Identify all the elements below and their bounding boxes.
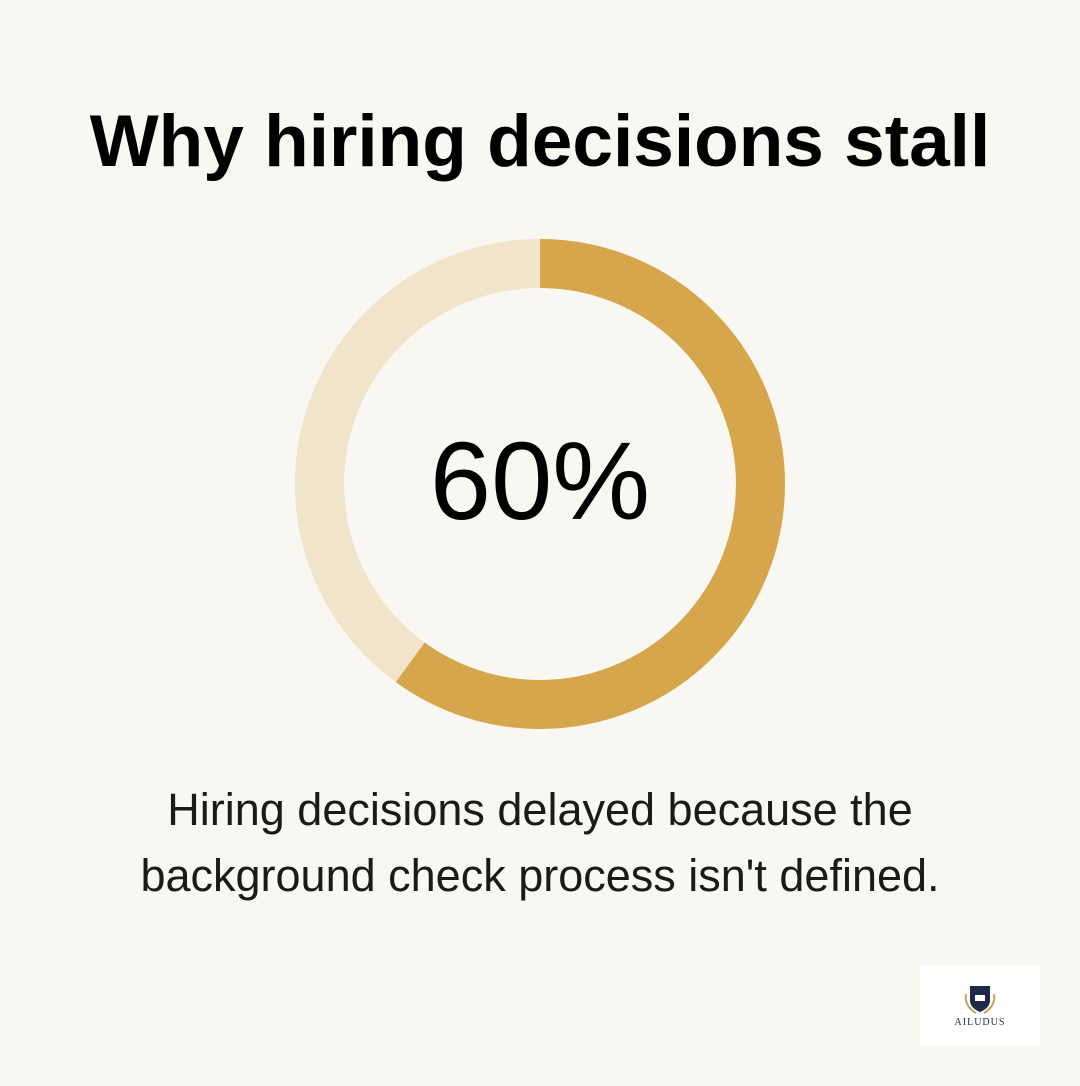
donut track <box>320 264 760 704</box>
donut value 60% <box>320 264 760 704</box>
logo text: AILUDUS <box>955 1017 1005 1028</box>
title: Why hiring decisions stall <box>90 101 990 182</box>
center value: 60% <box>430 420 650 543</box>
caption <box>140 784 940 901</box>
logo <box>920 966 1040 1046</box>
icon: shield <box>966 986 994 1013</box>
caption: Hiring decisions delayed because the <box>167 784 913 835</box>
caption: background check process isn't defined. <box>140 850 940 901</box>
